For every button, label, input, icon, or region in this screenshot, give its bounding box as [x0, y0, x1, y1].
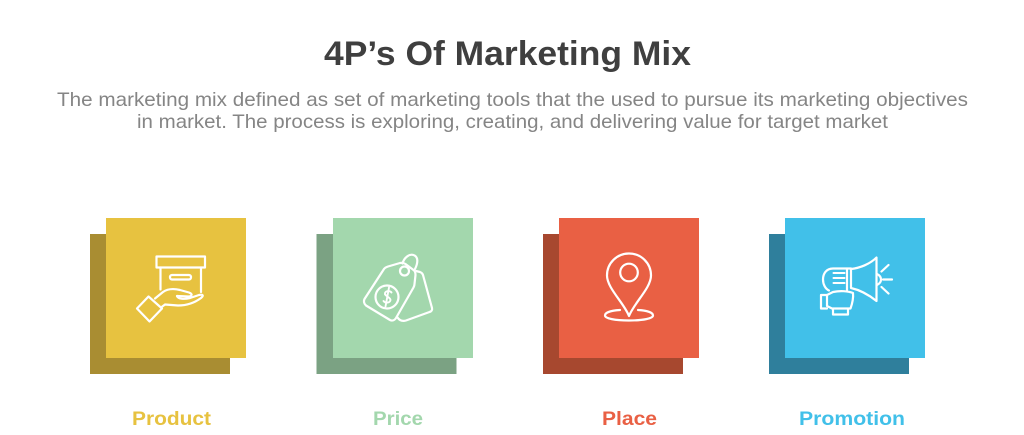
promotion back square [769, 234, 909, 374]
title: 4P’s Of Marketing Mix [324, 35, 691, 73]
icon: hand holding box [137, 256, 205, 322]
description text: The marketing mix defined as set of marketing tools that the used to pursue its marketing objectives [57, 89, 968, 111]
description text: in market. The process is exploring, creating, and delivering value for target market [137, 111, 889, 133]
label: price: Price [373, 408, 423, 430]
description text [57, 89, 968, 133]
icon: price tags [364, 255, 432, 321]
panel: promotion [769, 218, 925, 430]
label: place: Place [602, 408, 657, 430]
product back square [90, 234, 230, 374]
panel: place [543, 218, 699, 430]
price back square [316, 234, 456, 374]
label: promotion: Promotion [799, 408, 905, 430]
label: product: Product [132, 408, 212, 430]
panel: price [316, 218, 473, 430]
icon: megaphone [821, 258, 892, 314]
icon: map pin [605, 254, 653, 320]
product front square [106, 218, 246, 358]
price front square [333, 218, 473, 358]
panel: product [90, 218, 246, 430]
promotion front square [785, 218, 925, 358]
place back square [543, 234, 683, 374]
place front square [559, 218, 699, 358]
